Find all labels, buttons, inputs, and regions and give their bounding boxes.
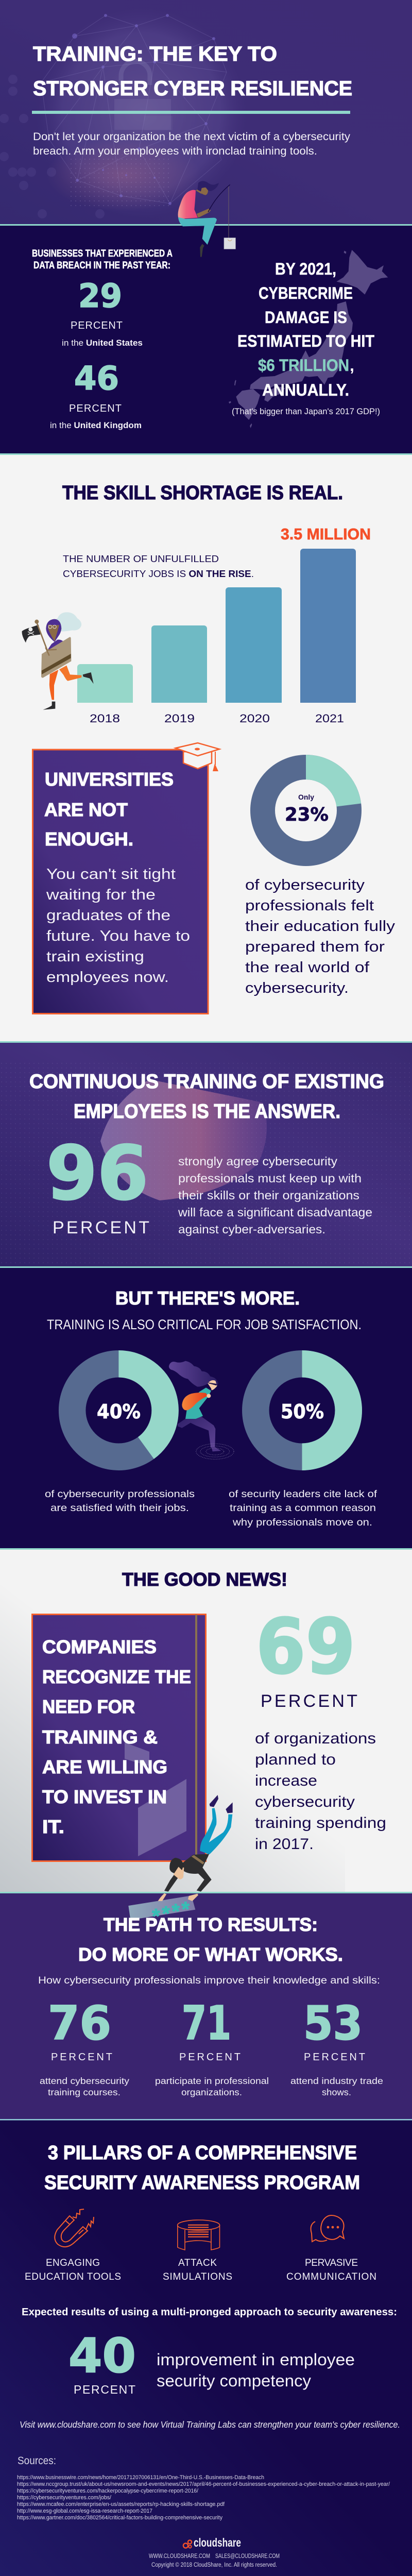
title: TRAINING: THE KEY TO xyxy=(33,43,277,65)
stat: 71 percent: PERCENT xyxy=(179,2052,241,2063)
callout text xyxy=(42,1636,191,1837)
globe and padlock background xyxy=(0,7,247,218)
footer contact: WWW.CLOUDSHARE.COM xyxy=(149,2553,210,2560)
callout text: future. You have to xyxy=(46,928,190,944)
callout text: TO INVEST IN xyxy=(42,1786,167,1807)
stat description: professionals must keep up with xyxy=(178,1172,362,1185)
section heading xyxy=(44,2142,360,2194)
callout text: COMPANIES xyxy=(42,1636,157,1657)
data breach heading: BUSINESSES THAT EXPERIENCED A xyxy=(32,248,173,259)
stat: 96 percent: 96 xyxy=(46,1130,148,1216)
cybercrime damage statement: (That's bigger than Japan's 2017 GDP!) xyxy=(232,407,380,416)
stat: 46 percent in the United Kingdom xyxy=(50,360,142,430)
section heading: 3 PILLARS OF A COMPREHENSIVE xyxy=(48,2142,357,2164)
section heading: TRAINING IS ALSO CRITICAL FOR JOB SATISFACTION. xyxy=(47,1317,362,1332)
panel: the good news xyxy=(0,1549,412,1893)
bar chart: 2018 xyxy=(90,712,120,725)
panel: header xyxy=(0,0,412,225)
sources list: http://www.esg-global.com/esg-issa-research-report-2017 xyxy=(17,2508,152,2514)
expected results heading: Expected results of using a multi-pronged approach to security awareness: xyxy=(22,2307,397,2318)
stat: 53 percent: 53 xyxy=(303,1996,363,2050)
bar chart callout: 3.5 million: 3.5 MILLION xyxy=(281,525,371,543)
donut description: 40 percent: are satisfied with their jobs. xyxy=(50,1502,189,1514)
sources list: https://www.businesswire.com/news/home/20171207006131/en/One-Third-U.S.-Businesses-Data-Breach xyxy=(17,2475,264,2481)
panel: skill shortage xyxy=(0,453,412,1042)
icon: magnet xyxy=(55,2209,94,2247)
stat: 96 percent: PERCENT xyxy=(53,1218,149,1238)
icon: chat bubbles xyxy=(311,2215,344,2242)
stat description: planned to xyxy=(255,1751,336,1768)
sources heading: Sources: xyxy=(18,2455,56,2467)
callout text: IT. xyxy=(42,1816,64,1837)
callout text: ARE WILLING xyxy=(42,1756,167,1777)
footer contact xyxy=(149,2553,280,2568)
cybercrime damage statement: DAMAGE IS xyxy=(265,308,347,327)
stat description: cybersecurity xyxy=(255,1793,355,1810)
stat: 71 percent: organizations. xyxy=(181,2087,242,2097)
title underline xyxy=(32,111,350,114)
map of Japan xyxy=(229,250,388,428)
pillar label: pervasive communication: PERVASIVE xyxy=(305,2258,358,2268)
callout text: employees now. xyxy=(46,969,169,986)
section heading: BUT THERE'S MORE. xyxy=(115,1287,300,1309)
stat: 29 percent in the United States: 29 xyxy=(78,277,122,315)
donut chart: 50 percent xyxy=(255,1350,362,1470)
sources list: https://cybersecurityventures.com/jobs/ xyxy=(17,2495,111,2501)
stat: 76 percent: training courses. xyxy=(48,2087,121,2097)
stat description: improvement in employee xyxy=(157,2350,355,2369)
illustration: pirate with credit card xyxy=(22,612,94,710)
donut chart: 23 percent: Only xyxy=(298,793,314,801)
stat description xyxy=(178,1155,372,1236)
panel: continuous training xyxy=(0,1042,412,1267)
sources list: https://www.mcafee.com/enterprise/en-us/assets/reports/rp-hacking-skills-shortage.pdf xyxy=(17,2501,225,2507)
section heading xyxy=(47,1287,362,1332)
sources list: https://cybersecurityventures.com/hackerpocalypse-cybercrime-report-2016/ xyxy=(17,2488,198,2494)
stat description: in 2017. xyxy=(255,1836,314,1853)
stat: 46 percent in the United Kingdom: PERCENT xyxy=(69,403,122,414)
donut chart: 23 percent xyxy=(263,755,361,854)
icon: attack simulation screen xyxy=(178,2220,220,2250)
footer contact: SALES@CLOUDSHARE.COM xyxy=(215,2553,280,2560)
callout heading: ARE NOT xyxy=(44,799,128,820)
stat description: training spending xyxy=(255,1815,386,1832)
stat: 40 percent: 40 xyxy=(68,2328,136,2383)
stat: 29 percent in the United States xyxy=(62,277,143,348)
cybercrime damage statement: BY 2021, xyxy=(275,260,336,278)
stat: 76 percent: 76 xyxy=(48,1996,111,2050)
sub-heading: How cybersecurity professionals improve their knowledge and skills: xyxy=(38,1975,380,1986)
donut description: professionals felt xyxy=(245,897,374,914)
divider line under header xyxy=(0,224,412,226)
pillar label: engaging education tools: ENGAGING xyxy=(46,2258,100,2268)
stat: 46 percent in the United Kingdom: 46 xyxy=(74,360,119,397)
donut description: 50 percent: of security leaders cite lack of xyxy=(229,1488,377,1500)
title xyxy=(33,43,352,100)
section heading: THE GOOD NEWS! xyxy=(122,1569,287,1590)
stat description xyxy=(157,2350,355,2390)
stat description: security competency xyxy=(157,2371,311,2390)
pillar label: engaging education tools xyxy=(25,2258,121,2282)
section heading: EMPLOYEES IS THE ANSWER. xyxy=(74,1100,340,1123)
cybercrime damage statement: CYBERCRIME xyxy=(259,284,353,302)
stat: 40 percent: PERCENT xyxy=(74,2383,135,2396)
stat: 53 percent: shows. xyxy=(322,2087,351,2097)
stat description: of organizations xyxy=(255,1730,376,1747)
donut description xyxy=(245,877,396,996)
data breach heading: DATA BREACH IN THE PAST YEAR: xyxy=(33,260,170,271)
callout text: train existing xyxy=(46,948,144,965)
cybercrime damage statement xyxy=(232,260,380,416)
stat description: their skills or their organizations xyxy=(178,1189,359,1202)
illustration: person fishing xyxy=(178,181,235,257)
cybercrime damage statement: ESTIMATED TO HIT xyxy=(237,332,374,350)
pillar label: engaging education tools: EDUCATION TOOLS xyxy=(25,2272,121,2282)
section heading: DO MORE OF WHAT WORKS. xyxy=(78,1944,343,1965)
illustration: runner with sack xyxy=(169,1361,234,1459)
pillar label: attack simulations: SIMULATIONS xyxy=(163,2272,232,2282)
donut description: 40 percent: of cybersecurity professionals xyxy=(45,1488,195,1500)
stat: 46 percent in the United Kingdom: in the United Kingdom xyxy=(50,420,142,430)
callout text: graduates of the xyxy=(46,907,170,924)
callout text: TRAINING & xyxy=(42,1726,158,1748)
donut description: of cybersecurity xyxy=(245,877,365,893)
donut description: 50 percent xyxy=(229,1488,377,1528)
stat: 29 percent in the United States: PERCENT xyxy=(71,320,123,331)
cybercrime damage statement: ANNUALLY. xyxy=(262,381,349,399)
shield background xyxy=(0,1061,412,1267)
stat: 71 percent xyxy=(155,1996,269,2097)
stat: 69 percent: PERCENT xyxy=(261,1691,357,1711)
donut chart: 40 percent xyxy=(72,1350,179,1459)
sources list xyxy=(17,2475,390,2521)
stat: 53 percent: attend industry trade xyxy=(290,2076,383,2086)
stat: 71 percent: participate in professional xyxy=(155,2076,269,2086)
donut chart: 50 percent: 50% xyxy=(281,1400,324,1423)
bar chart caption: THE NUMBER OF UNFULFILLED xyxy=(63,554,219,564)
logo: cloudshare xyxy=(183,2536,241,2549)
stat: 69 percent: 69 xyxy=(256,1603,355,1691)
bar chart: 2020 xyxy=(239,712,270,725)
callout: universities are not enough xyxy=(33,750,208,1014)
bar chart caption: CYBERSECURITY JOBS IS ON THE RISE . xyxy=(63,569,254,579)
stat: 76 percent: PERCENT xyxy=(51,2052,112,2063)
intro text: Don't let your organization be the next victim of a cybersecurity xyxy=(33,130,350,143)
donut description: 40 percent xyxy=(45,1488,195,1514)
sources list: https://www.nccgroup.trust/uk/about-us/newsroom-and-events/news/2017/april/46-percent-of-businesses-experienced-a-cyber-breach-or-attack-in-past-year/ xyxy=(17,2481,390,2487)
donut chart: 23 percent: 23% xyxy=(285,804,329,825)
callout: companies recognize the need xyxy=(32,1615,206,1861)
donut chart: 40 percent: 40% xyxy=(97,1400,141,1423)
pillar label: pervasive communication: COMMUNICATION xyxy=(286,2272,376,2282)
stat: 53 percent: PERCENT xyxy=(304,2052,365,2063)
sources list: https://www.gartner.com/doc/3802564/critical-factors-building-comprehensive-security xyxy=(17,2515,223,2521)
intro text: breach. Arm your employees with ironclad training tools. xyxy=(33,145,317,157)
donut description: the real world of xyxy=(245,959,370,976)
illustration: person hanging from rope reaching password xyxy=(128,1795,233,1927)
stat: 71 percent: 71 xyxy=(182,1996,231,2050)
callout text: You can't sit tight xyxy=(46,866,176,883)
stat description xyxy=(255,1730,386,1853)
stat: 76 percent: attend cybersecurity xyxy=(40,2076,129,2086)
section heading: CONTINUOUS TRAINING OF EXISTING xyxy=(29,1071,384,1093)
pillar label: pervasive communication xyxy=(286,2258,376,2282)
panel: three pillars xyxy=(0,2120,412,2576)
stat description: will face a significant disadvantage xyxy=(178,1206,372,1219)
section heading: THE PATH TO RESULTS: xyxy=(104,1914,318,1935)
donut description: their education fully xyxy=(245,918,396,935)
bar chart: 2021 xyxy=(315,712,344,725)
donut description: cybersecurity. xyxy=(245,980,349,996)
illustration: person hanging from rope reaching password: **** xyxy=(152,1898,190,1927)
section heading: THE SKILL SHORTAGE IS REAL. xyxy=(62,482,343,504)
stat description: against cyber-adversaries. xyxy=(178,1223,325,1236)
donut description: 50 percent: why professionals move on. xyxy=(232,1517,372,1528)
callout heading: UNIVERSITIES xyxy=(45,769,174,790)
callout text: waiting for the xyxy=(46,887,156,903)
cybercrime damage statement: , xyxy=(350,356,354,375)
section heading: SECURITY AWARENESS PROGRAM xyxy=(44,2172,360,2194)
bar chart: 2019 xyxy=(164,712,195,725)
stat: 76 percent xyxy=(40,1996,129,2097)
stat description: strongly agree cybersecurity xyxy=(178,1155,338,1168)
pillar label: attack simulations xyxy=(163,2258,232,2282)
donut description: 50 percent: training as a common reason xyxy=(230,1502,376,1514)
bar chart xyxy=(77,549,356,725)
panel background: path to results xyxy=(0,1893,412,2121)
stat description: increase xyxy=(255,1772,317,1789)
section heading xyxy=(78,1914,343,1965)
stat: 29 percent in the United States: in the United States xyxy=(62,338,143,348)
callout heading xyxy=(44,769,174,850)
intro text xyxy=(33,130,350,157)
donut description: prepared them for xyxy=(245,939,385,955)
stat: 53 percent xyxy=(290,1996,383,2097)
section heading xyxy=(29,1071,384,1123)
callout text: NEED FOR xyxy=(42,1696,135,1717)
footer contact: Copyright © 2018 CloudShare, Inc. All rights reserved. xyxy=(151,2562,277,2568)
bar chart caption xyxy=(63,554,254,579)
pillar label: attack simulations: ATTACK xyxy=(178,2258,217,2268)
callout heading: ENOUGH. xyxy=(45,828,133,850)
callout text: RECOGNIZE THE xyxy=(42,1666,191,1687)
panel: job satisfaction xyxy=(0,1267,412,1549)
title: STRONGER CYBER RESILIENCE xyxy=(33,77,352,100)
callout text xyxy=(46,866,190,986)
icon: graduation cap xyxy=(176,743,219,771)
panel: data breach and cybercrime cost xyxy=(0,225,412,453)
cybercrime damage statement: $6 TRILLION xyxy=(258,356,349,375)
panel: the path to results xyxy=(38,1914,383,2097)
data breach heading xyxy=(32,248,173,271)
logo: cloudshare: cloudshare xyxy=(194,2536,241,2549)
